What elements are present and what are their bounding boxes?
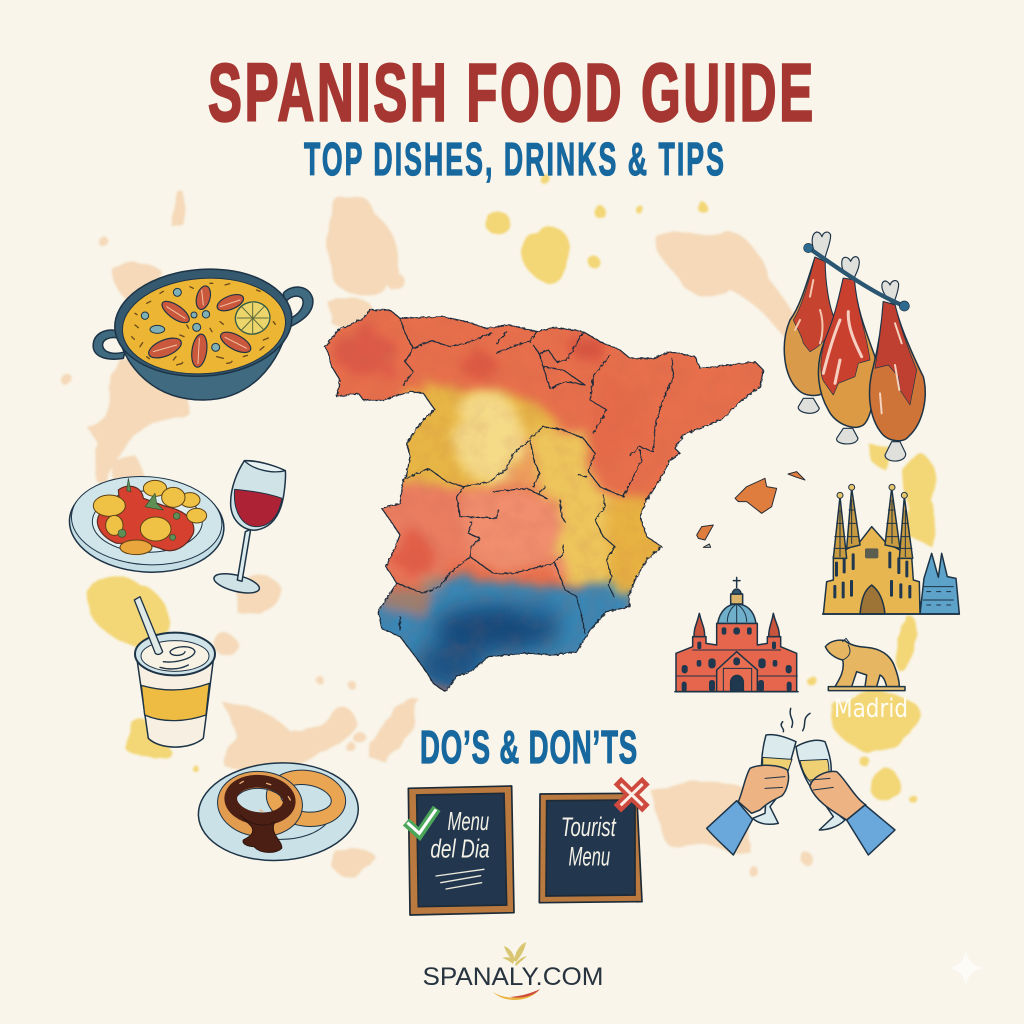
- icon: paella pan: [93, 263, 313, 400]
- logo: spanaly.com: [422, 942, 604, 1000]
- chalkboard: tourist menu: Menu: [568, 841, 610, 871]
- icon: toasting glasses and hands: [707, 708, 895, 855]
- subtitle: TOP DISHES, DRINKS & TIPS: [304, 133, 724, 185]
- chalkboard: menu del dia: Menu: [447, 806, 489, 836]
- watercolor stains: [63, 177, 935, 878]
- Balearic islands: [697, 472, 805, 547]
- heading: do's and don'ts: DO’S & DON’TS: [420, 723, 637, 774]
- icon: red wine glass: [212, 461, 286, 597]
- icon: horchata cup: [134, 597, 215, 747]
- icon: red cathedral: [675, 577, 798, 692]
- icon: hanging jamon legs: [784, 232, 925, 461]
- icon: churros plate: [196, 759, 361, 864]
- chalkboard: menu del dia: [406, 786, 514, 915]
- icon: sparkle: [948, 950, 984, 986]
- icon: Sagrada Familia: [823, 484, 959, 614]
- label: Madrid: Madrid: [834, 694, 908, 724]
- icon: red cross: [617, 781, 646, 809]
- chalkboard: menu del dia: del Dia: [430, 833, 490, 863]
- region borders: [325, 310, 763, 692]
- icon: green check: [406, 808, 437, 834]
- title: SPANISH FOOD GUIDE: [208, 47, 813, 139]
- logo: spanaly.com: SPANALY.COM: [422, 963, 604, 991]
- map of Spain: [313, 303, 813, 710]
- icon: Madrid bear statue: [825, 638, 905, 691]
- chalkboard: tourist menu: Tourist: [561, 812, 617, 842]
- chalkboard: tourist menu: [539, 781, 646, 903]
- icon: tapas plate: [66, 472, 227, 577]
